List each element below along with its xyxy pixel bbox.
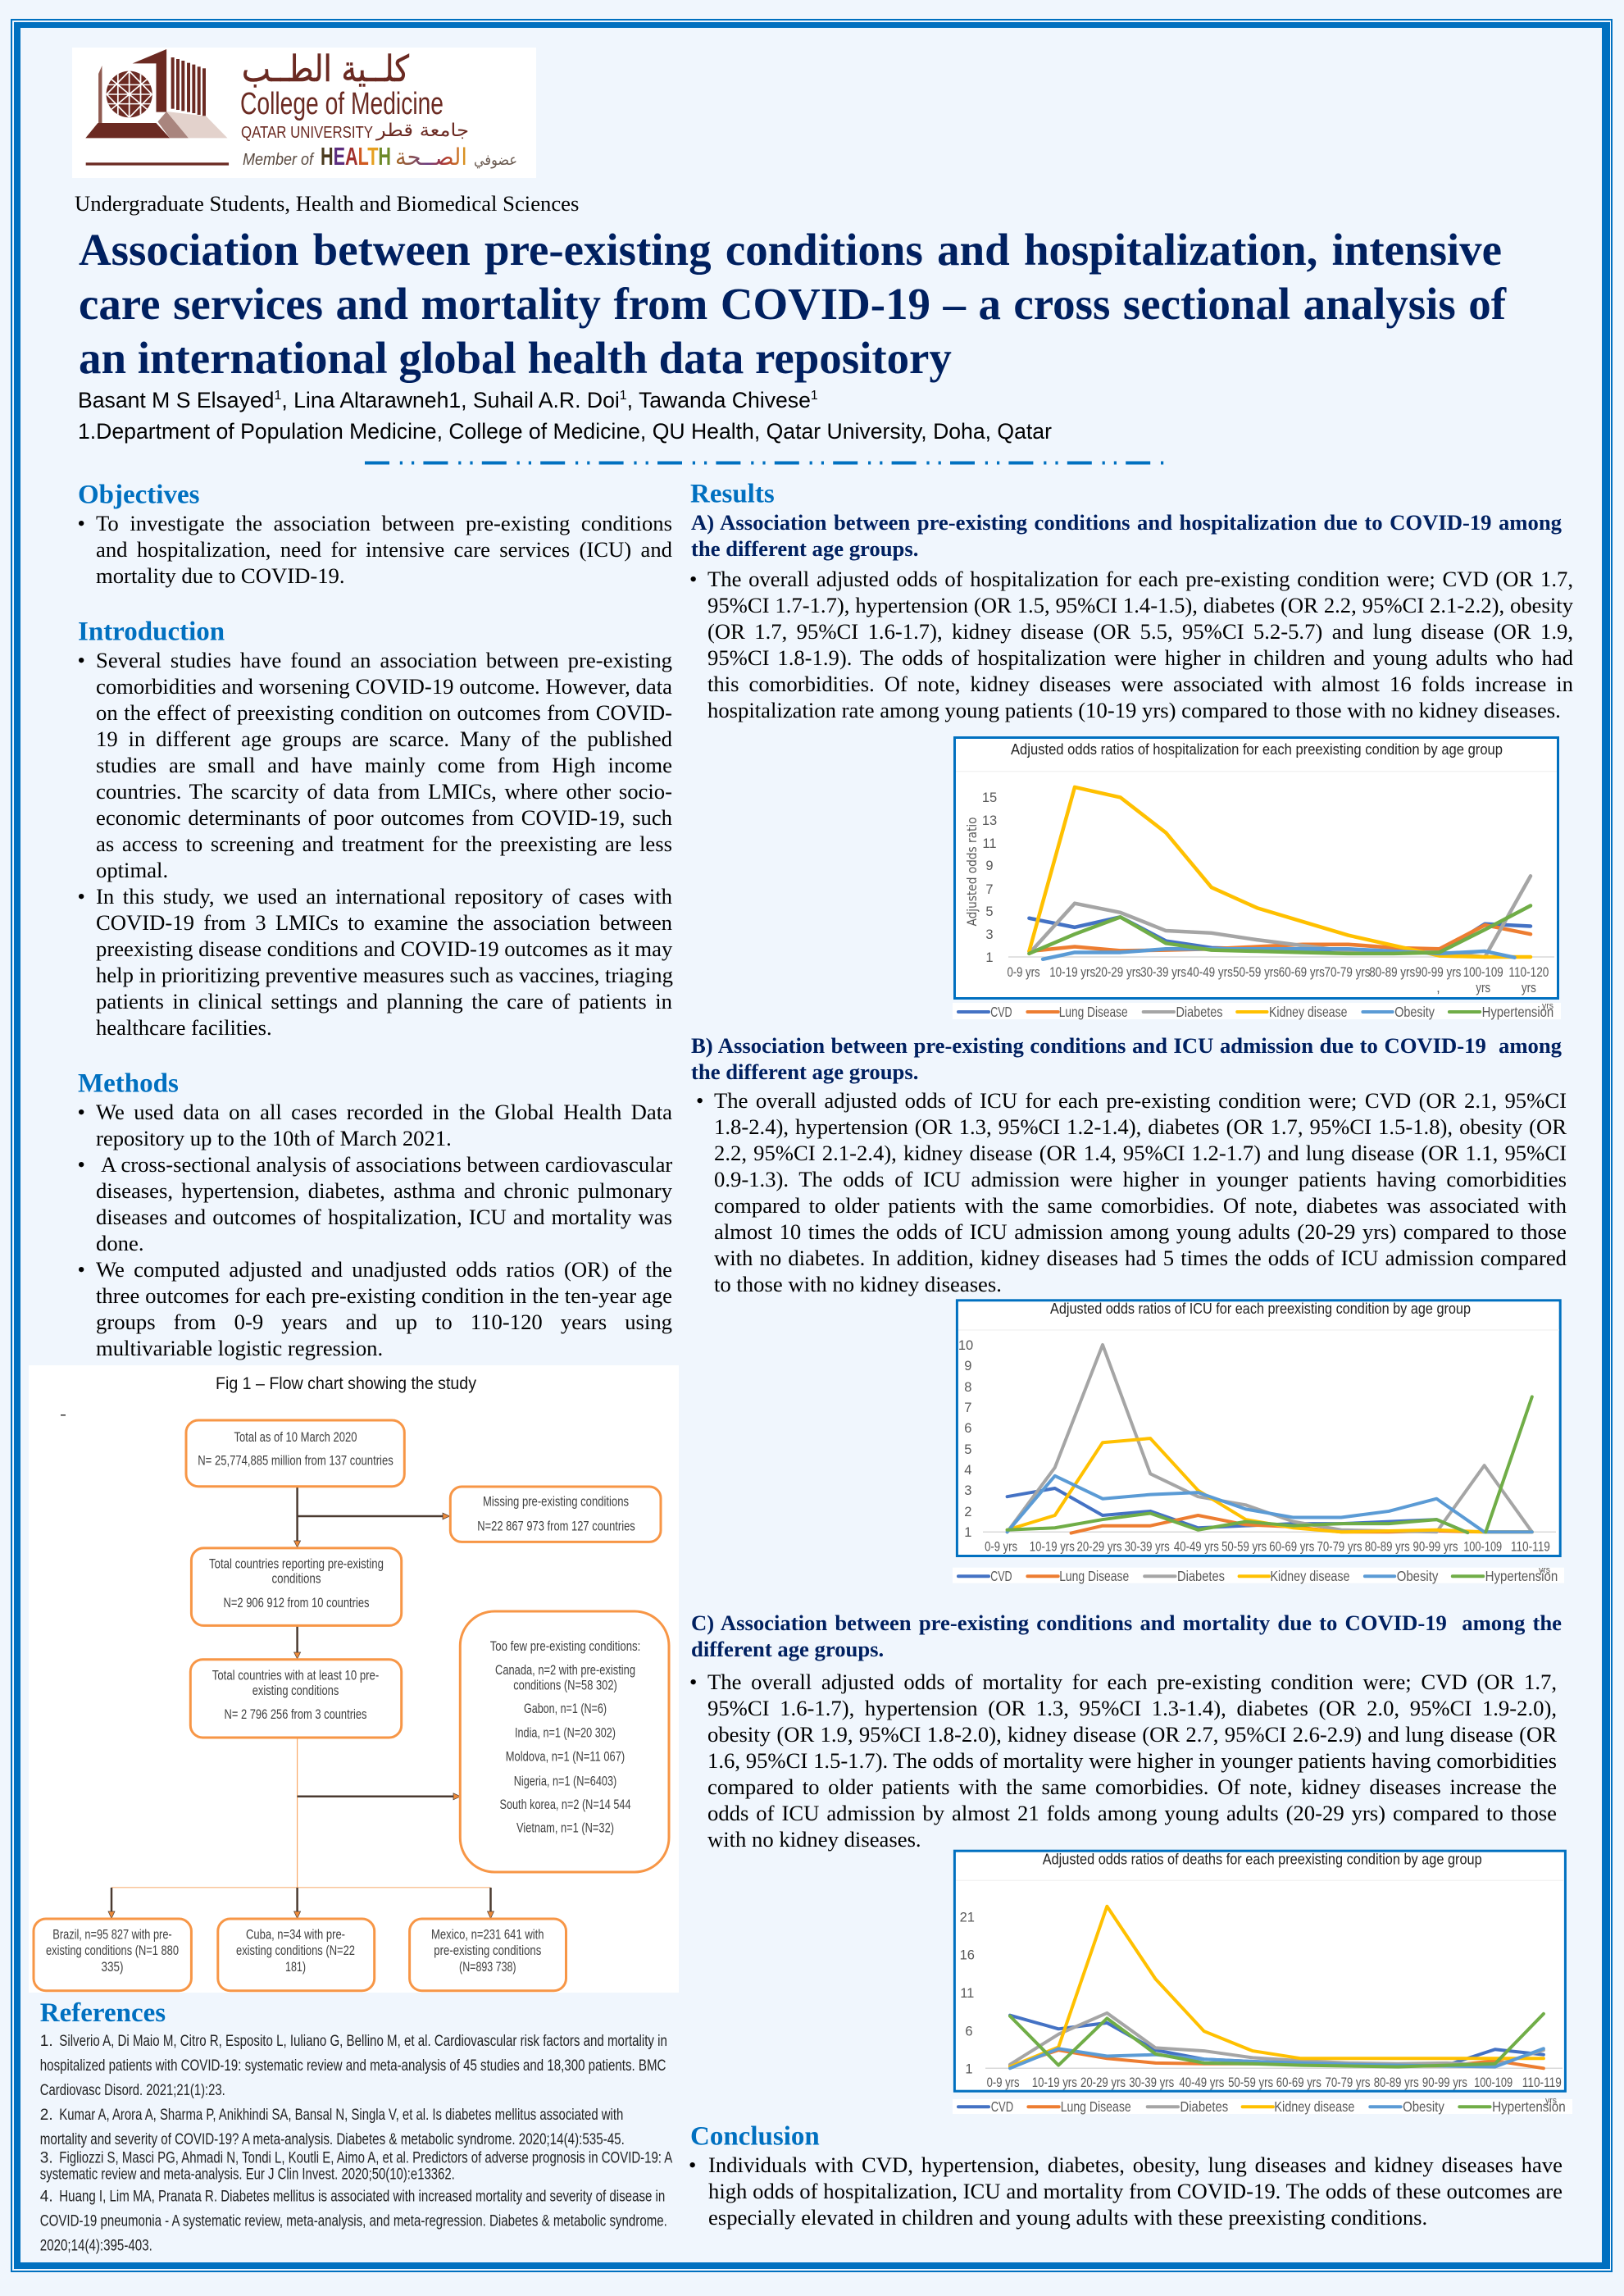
legend: Obesity <box>1403 2098 1444 2115</box>
x axis labels: 90-99 yrs <box>1422 2075 1467 2090</box>
chart title: Adjusted odds ratios of deaths for each preexisting condition by age group <box>1043 1850 1482 1867</box>
x axis labels: 10-19 yrs <box>1049 965 1095 980</box>
box: Cuba: existing conditions (N=22 <box>236 1943 355 1958</box>
methods text: diseases and outcomes of hospitalization, ICU and mortality was <box>96 1205 672 1229</box>
x axis labels: 90-99 yrs <box>1413 1540 1458 1555</box>
legend: Diabetes <box>1180 2098 1228 2115</box>
subheading A: the different age groups. <box>691 536 918 561</box>
chart title: Adjusted odds ratios of hospitalization for each preexisting condition by age group <box>1011 740 1503 758</box>
results B text: The overall adjusted odds of ICU for each pre-existing condition were; CVD (OR 2.1, 95%CI <box>714 1088 1567 1113</box>
heading: methods: Methods <box>78 1069 179 1099</box>
department affiliation: 1.Department of Population Medicine, College of Medicine, QU Health, Qatar University, Doha, Qatar <box>78 419 1052 444</box>
box: total as of 10 March 2020 <box>186 1420 404 1487</box>
panel: methods <box>77 1069 672 1360</box>
conclusion text: high odds of hospitalization, ICU and mortality from COVID-19. The odds of these outcomes are <box>708 2179 1563 2203</box>
box: at least 10 pre-existing conditions: Total countries with at least 10 pre- <box>212 1669 379 1683</box>
y axis labels <box>960 1911 975 2076</box>
box: Brazil: Brazil, n=95 827 with pre- <box>52 1927 172 1942</box>
results A text <box>689 567 1573 722</box>
box: too few pre-existing conditions: South korea, n=2 (N=14 544 <box>500 1797 631 1812</box>
panel: introduction: • <box>77 648 85 672</box>
reference list: 3. <box>40 2149 53 2166</box>
y axis title: Adjusted odds ratio <box>964 817 980 927</box>
logo: College of Medicine, Qatar University: QATAR UNIVERSITY <box>241 124 373 142</box>
y axis labels: 2 <box>964 1505 971 1519</box>
box: total countries reporting: N=2 906 912 from 10 countries <box>223 1596 369 1610</box>
legend: yrs <box>1542 1001 1553 1011</box>
y axis labels: 8 <box>964 1380 971 1395</box>
arrow: total to reporting <box>294 1487 301 1547</box>
legend: CVD <box>990 1004 1012 1020</box>
results A text: 95%CI 1.8-1.9). The odds of hospitalization were higher in children and young adults who had <box>707 645 1573 670</box>
x axis labels: 30-39 yrs <box>1125 1540 1170 1555</box>
conclusion text <box>689 2152 1563 2230</box>
x axis labels: 50-59 yrs <box>1221 1540 1267 1555</box>
flow chart title: Fig 1 – Flow chart showing the study <box>216 1374 476 1393</box>
box: too few pre-existing conditions: Nigeria, n=1 (N=6403) <box>514 1774 616 1788</box>
results B text: compared to older patients with the same comorbidies. Of note, diabetes was associated with <box>714 1193 1567 1218</box>
panel: results section A text <box>689 510 1573 722</box>
x axis labels <box>1007 965 1549 995</box>
introduction text: economic determinants of poor outcomes from COVID-19, such <box>96 805 672 830</box>
chart title: Adjusted odds ratios of ICU for each preexisting condition by age group <box>1050 1300 1471 1317</box>
methods text: repository up to the 10th of March 2021. <box>96 1126 452 1150</box>
panel: methods: • <box>77 1152 85 1177</box>
y axis labels: 6 <box>965 2024 973 2039</box>
introduction text: patients in clinical settings and planning the care of patients in <box>96 989 672 1014</box>
methods text: diseases, hypertension, diabetes, asthma and chronic pulmonary <box>96 1178 672 1203</box>
legend: yrs <box>1545 2096 1557 2106</box>
x axis labels: 30-39 yrs <box>1129 2075 1174 2090</box>
panel: objectives <box>77 481 672 588</box>
box: total countries reporting: Total countries reporting pre-existing <box>209 1557 384 1572</box>
x axis labels: 110-119 <box>1511 1540 1550 1555</box>
introduction text: 19 in different age groups are scarce. Many of the published <box>96 727 672 751</box>
title <box>79 225 1507 383</box>
introduction text <box>77 648 673 1040</box>
legend: Lung Disease <box>1061 2098 1131 2115</box>
subheading C <box>691 1610 1562 1661</box>
methods text: three outcomes for each pre-existing condition in the ten-year age <box>96 1283 672 1308</box>
results A text: 95%CI 1.7-1.7), hypertension (OR 1.5, 95%CI 1.4-1.5), diabetes (OR 2.2, 95%CI 2.1-2.2), obesity <box>707 593 1573 617</box>
y axis labels <box>958 1338 973 1540</box>
box: total countries reporting: conditions <box>272 1572 321 1587</box>
introduction text: COVID-19 from 3 LMICs to examine the association between <box>96 910 672 935</box>
x axis labels: yrs <box>1476 981 1490 995</box>
results C text: The overall adjusted odds of mortality for each pre-existing condition were; CVD (OR 1.7, <box>707 1670 1557 1694</box>
x axis labels: 70-79 yrs <box>1317 1540 1362 1555</box>
legend: Diabetes <box>1177 1568 1225 1584</box>
heading: objectives: Objectives <box>78 481 199 510</box>
x axis labels: 80-89 yrs <box>1369 965 1415 980</box>
objectives text: and hospitalization, need for intensive care services (ICU) and <box>96 537 672 562</box>
dashed divider <box>365 461 1164 464</box>
series: obesity <box>1010 2048 1544 2068</box>
methods text: done. <box>96 1231 143 1255</box>
results B text: almost 10 times the odds of ICU admission among young adults (20-29 yrs) compared to those <box>714 1219 1567 1244</box>
box: too few pre-existing conditions: conditions (N=58 302) <box>513 1678 617 1692</box>
panel: results section C text: • <box>689 1670 697 1694</box>
series: diabetes <box>1008 1345 1532 1532</box>
conclusion text: Individuals with CVD, hypertension, diabetes, obesity, lung diseases and kidney diseases have <box>708 2152 1563 2177</box>
series: lung disease <box>1029 925 1531 951</box>
methods text: We computed adjusted and unadjusted odds ratios (OR) of the <box>96 1257 672 1282</box>
logo: College of Medicine, Qatar University: Member of <box>243 151 315 169</box>
legend: Hypertension <box>1492 2098 1566 2115</box>
introduction text: healthcare facilities. <box>96 1015 272 1040</box>
panel: objectives: • <box>77 511 85 535</box>
subheading B <box>691 1033 1562 1084</box>
x axis labels: 60-69 yrs <box>1276 2075 1321 2090</box>
reference list: 2. <box>40 2107 53 2124</box>
x axis labels: 100-109 <box>1463 1540 1502 1555</box>
introduction text: optimal. <box>96 858 168 882</box>
box: Mexico: (N=893 738) <box>459 1960 516 1975</box>
y axis labels: 7 <box>964 1401 971 1415</box>
y axis labels: 16 <box>960 1948 975 1963</box>
legend: Obesity <box>1397 1568 1439 1584</box>
logo: College of Medicine, Qatar University: كلــية الطــب <box>242 48 409 90</box>
results C text: 95%CI 1.6-1.7), hypertension (OR 1.3, 95%CI 1.3-1.4), diabetes (OR 2.0, 95%CI 1.9-2.0), <box>707 1696 1557 1720</box>
reference list: systematic review and meta-analysis. Eur J Clin Invest. 2020;50(10):e13362. <box>40 2166 455 2183</box>
introduction text: preexisting disease conditions and COVID-19 outcomes as it may <box>96 936 672 961</box>
methods text: We used data on all cases recorded in the Global Health Data <box>96 1100 672 1124</box>
y axis labels: 5 <box>985 904 994 919</box>
box: Mexico: pre-existing conditions <box>434 1943 541 1958</box>
box: too few pre-existing conditions: Too few pre-existing conditions: <box>490 1639 640 1654</box>
line series <box>1029 787 1531 959</box>
legend <box>953 2096 1572 2115</box>
y axis labels: 7 <box>985 882 994 897</box>
y axis labels: 3 <box>964 1483 971 1498</box>
y axis labels: 4 <box>964 1463 971 1478</box>
box: at least 10 pre-existing conditions: existing conditions <box>252 1683 339 1698</box>
x axis labels: 40-49 yrs <box>1179 2075 1224 2090</box>
legend: Hypertension <box>1482 1004 1553 1020</box>
introduction text: In this study, we used an international repository of cases with <box>96 884 672 909</box>
reference list <box>40 2033 673 2254</box>
x axis labels: 70-79 yrs <box>1325 2075 1371 2090</box>
logo: College of Medicine, Qatar University: عضوفي <box>474 152 517 169</box>
methods text: groups from 0-9 years and up to 110-120 years using <box>96 1310 672 1334</box>
panel: results section C text <box>689 1610 1562 1852</box>
box: total as of 10 March 2020: N= 25,774,885 million from 137 countries <box>198 1453 393 1468</box>
results B text: 0.9-1.3). The odds of ICU admission were higher in younger patients having comorbidities <box>714 1167 1567 1191</box>
objectives text <box>77 511 672 588</box>
introduction text: Several studies have found an association between pre-existing <box>96 648 672 672</box>
subheading C: different age groups. <box>691 1637 884 1661</box>
results B text: to those with no kidney diseases. <box>714 1272 1002 1296</box>
reference list: 2020;14(4):395-403. <box>40 2237 152 2254</box>
y axis labels: 11 <box>982 836 997 851</box>
results B text: with no diabetes. In addition, kidney diseases had 5 times the odds of ICU admission compared <box>714 1246 1567 1270</box>
introduction text: help in prioritizing preventive measures such as vaccines, triaging <box>96 963 673 987</box>
x axis labels: yrs <box>1522 981 1536 995</box>
results C text: compared to older patients with the same comorbidies. Of note, kidney diseases increase the <box>707 1774 1557 1799</box>
series: hypertension <box>1029 905 1531 954</box>
box: Brazil: existing conditions (N=1 880 <box>46 1943 179 1958</box>
methods text: A cross-sectional analysis of associations between cardiovascular <box>101 1152 672 1177</box>
box: missing pre-existing conditions <box>450 1487 661 1542</box>
results A text: The overall adjusted odds of hospitalization for each pre-existing condition were; CVD (OR 1.7, <box>707 567 1573 591</box>
y axis labels: 1 <box>965 2061 973 2076</box>
series: CVD <box>1008 1488 1467 1533</box>
box: too few pre-existing conditions: Vietnam, n=1 (N=32) <box>516 1821 614 1836</box>
series: lung disease <box>1071 1515 1532 1533</box>
series: CVD <box>1029 917 1531 952</box>
series: kidney disease <box>1029 787 1531 957</box>
panel: methods: • <box>77 1100 85 1124</box>
title: Association between pre-existing conditions and hospitalization, intensive <box>79 225 1502 274</box>
panel: results section B text: • <box>696 1088 703 1113</box>
y axis labels: 9 <box>985 859 994 873</box>
box: Mexico <box>410 1919 566 1991</box>
legend: Obesity <box>1394 1004 1435 1020</box>
x axis labels <box>987 2075 1562 2090</box>
heading: conclusion: Conclusion <box>690 2122 820 2152</box>
line series <box>1010 1906 1544 2068</box>
results B text: 1.8-2.4), hypertension (OR 1.3, 95%CI 1.2-1.4), diabetes (OR 1.7, 95%CI 1.5-1.8), obesity (OR <box>714 1114 1567 1139</box>
arrow: to missing <box>298 1513 449 1519</box>
box: too few pre-existing conditions: India, n=1 (N=20 302) <box>515 1726 616 1741</box>
box: too few pre-existing conditions: Gabon, n=1 (N=6) <box>524 1702 607 1716</box>
heading: results: Results <box>690 479 775 508</box>
x axis labels: 50-59 yrs <box>1233 965 1279 980</box>
x axis labels: 50-59 yrs <box>1228 2075 1273 2090</box>
x axis labels: 0-9 yrs <box>987 2075 1020 2090</box>
logo: College of Medicine, Qatar University: College of Medicine <box>240 87 444 121</box>
chart: deaths <box>953 1850 1572 2115</box>
reference list: 1. <box>40 2033 53 2050</box>
x axis labels: 30-39 yrs <box>1140 965 1186 980</box>
legend: yrs <box>1539 1565 1550 1575</box>
panel: flow chart <box>29 1365 679 1993</box>
results C text: obesity (OR 1.9, 95%CI 1.8-2.0), kidney disease (OR 2.7, 95%CI 2.6-2.9) and lung disease (OR <box>707 1722 1557 1747</box>
panel: methods: • <box>77 1257 85 1282</box>
box: Mexico: Mexico, n=231 641 with <box>431 1927 544 1942</box>
objectives text: To investigate the association between pre-existing conditions <box>96 511 672 535</box>
y axis labels: 1 <box>964 1525 971 1540</box>
box: at least 10 pre-existing conditions: N= 2 796 256 from 3 countries <box>225 1707 367 1722</box>
x axis labels: 80-89 yrs <box>1374 2075 1419 2090</box>
results A text: hospitalization rate among young patients (10-19 yrs) compared to those with no kidney diseases. <box>707 698 1561 722</box>
title: care services and mortality from COVID-19 – a cross sectional analysis of <box>79 279 1506 328</box>
legend <box>953 1001 1561 1020</box>
legend: Lung Disease <box>1059 1004 1128 1020</box>
x axis labels: 60-69 yrs <box>1269 1540 1314 1555</box>
introduction text: comorbidities and worsening COVID-19 outcome. However, data <box>96 674 672 699</box>
series: hypertension <box>1008 1396 1532 1533</box>
x axis labels: , <box>1436 981 1440 995</box>
box: missing pre-existing conditions: Missing pre-existing conditions <box>483 1495 629 1510</box>
legend: Diabetes <box>1176 1004 1223 1020</box>
logo: College of Medicine, Qatar University: الصــحة <box>395 144 467 171</box>
subheading A <box>691 510 1562 561</box>
legend: Hypertension <box>1485 1568 1558 1584</box>
y axis labels: 1 <box>985 950 994 965</box>
series: hypertension <box>1010 2014 1544 2066</box>
logo: College of Medicine, Qatar University <box>72 48 536 178</box>
introduction text: studies are small and have mainly come from High income <box>96 753 672 777</box>
y axis labels: 10 <box>958 1338 973 1353</box>
box: at least 10 pre-existing conditions <box>190 1660 402 1738</box>
results C text: odds of ICU admission by almost 21 folds among young adults (20-29 yrs) compared to those <box>707 1801 1557 1825</box>
x axis labels: 90-99 yrs <box>1415 965 1461 980</box>
results C text <box>689 1670 1557 1852</box>
arrows: to countries <box>108 1888 494 1919</box>
x axis labels: 20-29 yrs <box>1080 2075 1126 2090</box>
x axis labels: 20-29 yrs <box>1095 965 1141 980</box>
y axis labels: 3 <box>985 927 994 942</box>
y axis labels: 5 <box>964 1442 971 1457</box>
panel: introduction <box>77 617 673 1040</box>
series: kidney disease <box>1010 1906 1544 2066</box>
objectives text: mortality due to COVID-19. <box>96 563 345 588</box>
legend: Kidney disease <box>1274 2098 1354 2115</box>
x axis labels: 100-109 <box>1463 965 1503 980</box>
panel: results section A text: • <box>689 567 697 591</box>
box: too few pre-existing conditions <box>460 1611 669 1872</box>
arrow: to too few conditions <box>298 1793 461 1800</box>
series: kidney disease <box>1008 1438 1532 1532</box>
methods text <box>77 1100 672 1360</box>
results C text: 1.6, 95%CI 1.5-1.7). The odds of mortality were higher in younger patients having comorbidities <box>707 1748 1557 1773</box>
heading: references: References <box>40 1998 166 2028</box>
legend: Kidney disease <box>1271 1568 1349 1584</box>
conclusion text: especially elevated in children and young adults with these preexisting conditions. <box>708 2205 1427 2230</box>
affiliation line: Undergraduate Students, Health and Biomedical Sciences <box>75 191 579 216</box>
results C text: with no kidney diseases. <box>707 1827 921 1852</box>
subheading C: C) Association between pre-existing conditions and mortality due to COVID-19 among the <box>691 1610 1562 1635</box>
x axis labels: 0-9 yrs <box>1007 965 1039 980</box>
introduction text: on the effect of preexisting condition on outcomes from COVID- <box>96 700 672 725</box>
panel: conclusion <box>689 2122 1563 2230</box>
x axis labels: 110-119 <box>1522 2075 1562 2090</box>
y axis labels: 15 <box>982 790 997 805</box>
series: lung disease <box>1010 2050 1544 2068</box>
subheading B: B) Association between pre-existing conditions and ICU admission due to COVID-19 among <box>691 1033 1562 1058</box>
box: Brazil <box>34 1919 191 1991</box>
panel: introduction: • <box>77 884 85 909</box>
x axis labels: 100-109 <box>1474 2075 1513 2090</box>
x axis labels: 110-120 <box>1508 965 1549 980</box>
legend: Lung Disease <box>1059 1568 1129 1584</box>
box: too few pre-existing conditions: Canada, n=2 with pre-existing <box>495 1663 635 1678</box>
panel: results section B text <box>691 1033 1567 1296</box>
arrow: reporting to ten conditions <box>294 1626 301 1659</box>
reference list: Cardiovasc Disord. 2021;21(1):23. <box>40 2082 225 2099</box>
methods text: multivariable logistic regression. <box>96 1336 383 1360</box>
box: Cuba: 181) <box>285 1960 306 1975</box>
x axis labels: 10-19 yrs <box>1030 1540 1075 1555</box>
legend: CVD <box>990 1568 1012 1584</box>
legend <box>953 1565 1564 1584</box>
series: diabetes <box>1029 876 1531 957</box>
x axis labels: 40-49 yrs <box>1174 1540 1219 1555</box>
series: diabetes <box>1010 2013 1544 2066</box>
x axis labels: 10-19 yrs <box>1032 2075 1077 2090</box>
chart: ICU admission <box>953 1299 1564 1584</box>
box: total as of 10 March 2020: Total as of 10 March 2020 <box>234 1430 357 1445</box>
box: Cuba <box>218 1919 375 1991</box>
x axis labels <box>985 1540 1550 1555</box>
y axis labels: 21 <box>960 1911 975 1925</box>
series: obesity <box>1008 1476 1532 1532</box>
heading: introduction: Introduction <box>78 617 225 646</box>
box: too few pre-existing conditions: Moldova, n=1 (N=11 067) <box>506 1750 625 1765</box>
connector lines <box>111 1738 490 1888</box>
x axis labels: 80-89 yrs <box>1365 1540 1410 1555</box>
results B text: 2.2, 95%CI 2.1-2.4), kidney disease (OR 1.4, 95%CI 1.2-1.7) and lung disease (OR 1.1, 95%CI <box>714 1141 1567 1165</box>
reference list: 4. <box>40 2188 53 2205</box>
title: an international global health data repository <box>79 333 952 382</box>
series: obesity <box>1043 949 1515 959</box>
x axis labels: 40-49 yrs <box>1187 965 1233 980</box>
legend: CVD <box>991 2098 1013 2115</box>
y axis labels: 9 <box>964 1359 971 1374</box>
introduction text: countries. The scarcity of data from LMICs, where other socio- <box>96 779 672 804</box>
subheading A: A) Association between pre-existing conditions and hospitalization due to COVID-19 among <box>691 510 1562 535</box>
panel: conclusion: • <box>689 2152 696 2177</box>
x axis labels: 70-79 yrs <box>1325 965 1371 980</box>
y axis labels: 11 <box>960 1986 974 2001</box>
panel: references <box>40 1998 673 2254</box>
x axis labels: 60-69 yrs <box>1279 965 1325 980</box>
legend: Kidney disease <box>1269 1004 1348 1020</box>
introduction text: as access to screening and treatment for the preexisting are less <box>96 831 672 856</box>
box: total countries reporting <box>191 1548 402 1625</box>
x axis labels: 0-9 yrs <box>985 1540 1017 1555</box>
results A text: this comorbidities. Of note, kidney diseases were associated with almost 16 folds increase in <box>707 672 1573 696</box>
logo: College of Medicine, Qatar University: HEALTH <box>321 142 391 171</box>
box: missing pre-existing conditions: N=22 867 973 from 127 countries <box>477 1519 635 1533</box>
y axis labels: 6 <box>964 1421 971 1436</box>
box: Brazil: 335) <box>102 1960 123 1975</box>
y axis labels <box>982 790 997 965</box>
results B text <box>696 1088 1567 1296</box>
chart: hospitalization <box>953 736 1561 1020</box>
subheading B: the different age groups. <box>691 1059 918 1084</box>
y axis labels: 13 <box>982 813 997 828</box>
authors: Basant M S Elsayed1, Lina Altarawneh1, Suhail A.R. Doi1, Tawanda Chivese1 <box>78 388 818 412</box>
results A text: (OR 1.7, 95%CI 1.6-1.7), kidney disease (OR 5.5, 95%CI 5.2-5.7) and lung disease (OR 1.9, <box>707 619 1573 644</box>
box: Cuba: Cuba, n=34 with pre- <box>246 1927 345 1942</box>
logo: College of Medicine, Qatar University: جامعة قطر <box>375 121 469 141</box>
series: CVD <box>1010 2016 1544 2066</box>
x axis labels: 20-29 yrs <box>1077 1540 1121 1555</box>
line series <box>1008 1345 1532 1533</box>
